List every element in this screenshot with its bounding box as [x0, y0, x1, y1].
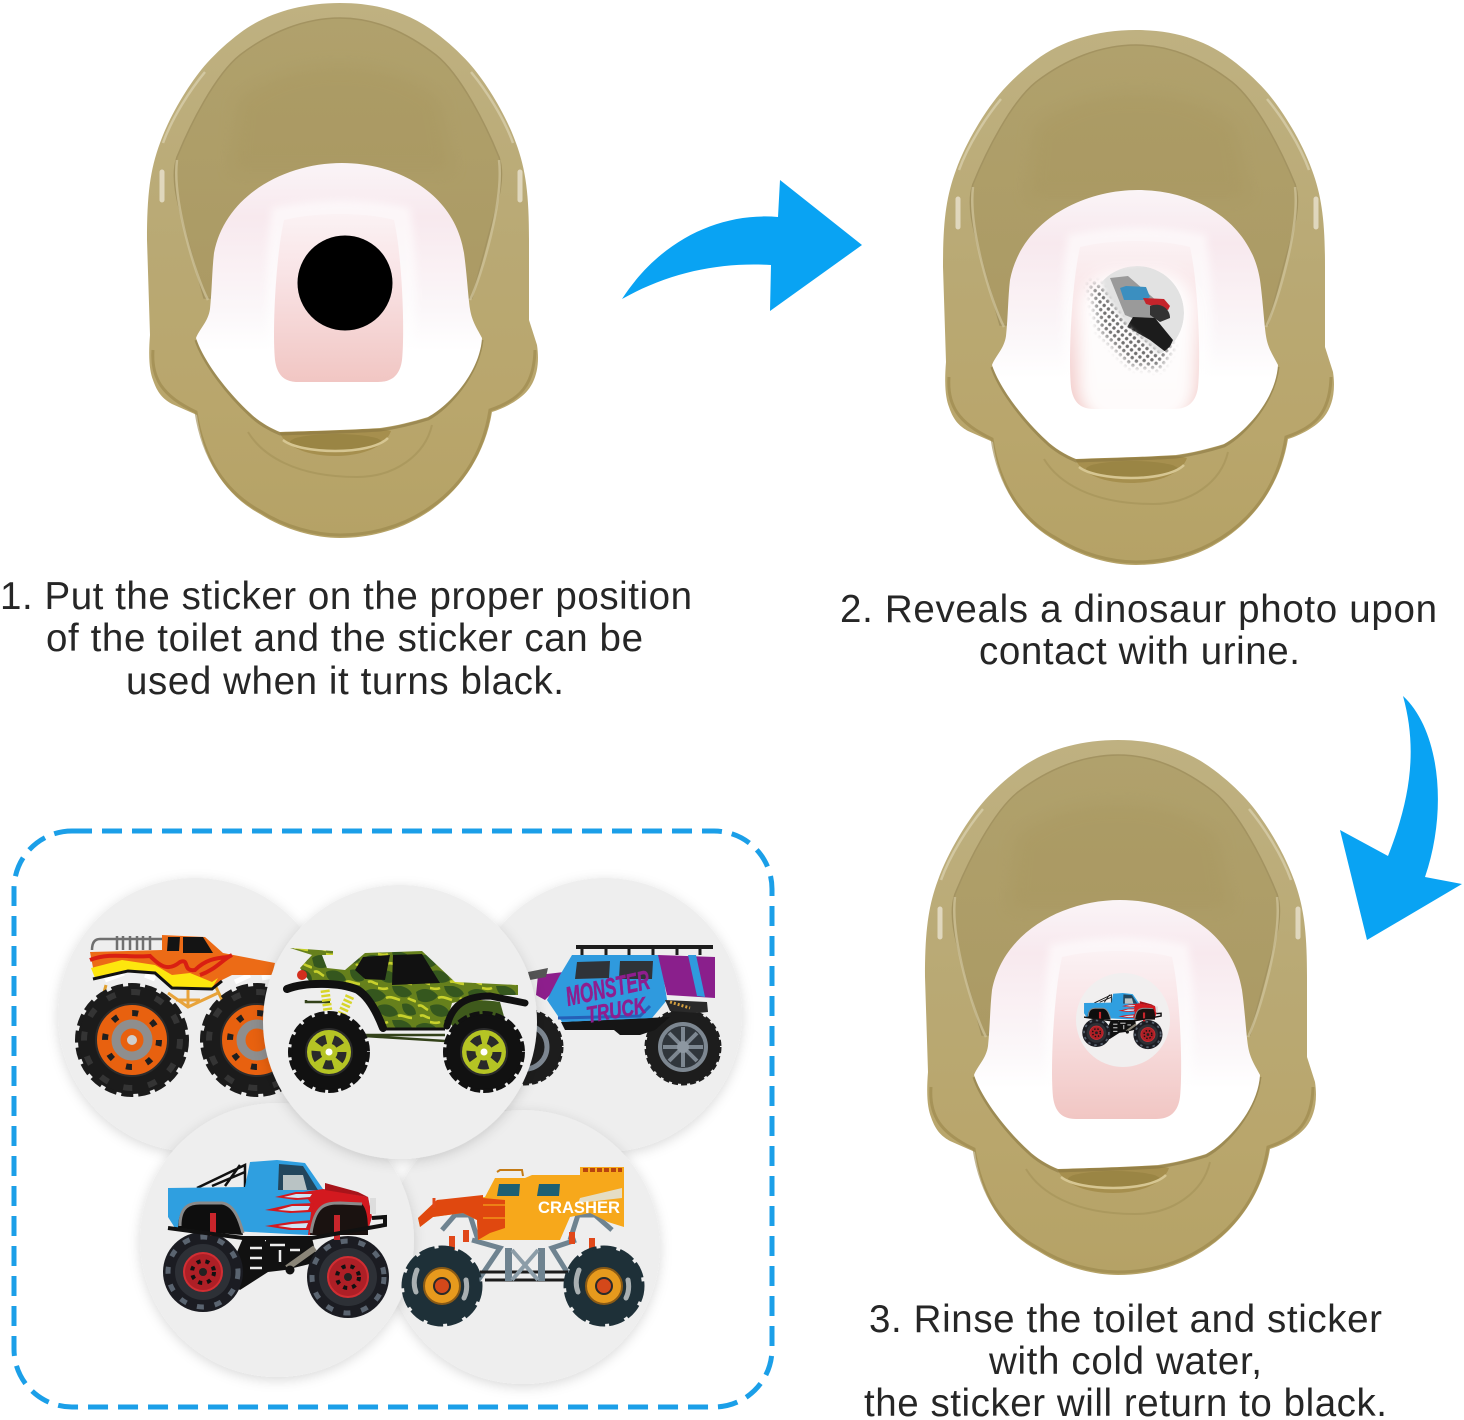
sticker 3: blue and purple monster truck: [468, 878, 742, 1152]
sticker 4: blue and red flame truck: [140, 1103, 414, 1377]
caption: step 3: with cold water,: [988, 1340, 1262, 1383]
sticker: revealed truck: [1102, 266, 1184, 356]
caption: step 1: of the toilet and the sticker can be: [46, 617, 643, 660]
panel: dashed sticker frame: [14, 831, 772, 1407]
truck lettering: MONSTER: [563, 965, 653, 1012]
caption: step 1: 1. Put the sticker on the proper position: [0, 575, 692, 618]
potty step 2 with partly revealed sticker: [943, 30, 1334, 565]
caption: step 1: used when it turns black.: [126, 660, 564, 703]
urine fade over the basin: [1078, 272, 1196, 428]
sticker 5: orange crasher truck base: [386, 1110, 660, 1384]
dither dots: [1086, 280, 1176, 373]
arrow: step 1 to step 2: [622, 180, 862, 311]
truck lettering: CRASHER: [538, 1198, 620, 1217]
arrow: step 2 to step 3: [1340, 696, 1462, 940]
potty step 1 with black sticker: [147, 3, 538, 538]
sticker 1: orange flame truck: [58, 878, 332, 1152]
potty step 3 with rinsed sticker: [925, 740, 1316, 1275]
sticker 2: camouflage truck: [263, 885, 537, 1159]
caption: step 3: 3. Rinse the toilet and sticker: [869, 1298, 1382, 1341]
caption: step 2: contact with urine.: [979, 630, 1300, 673]
sticker 5: orange crasher truck: [403, 1167, 643, 1325]
sticker 3: blue and purple monster truck: TRUCK: [584, 992, 649, 1028]
caption: step 2: 2. Reveals a dinosaur photo upon: [840, 588, 1437, 631]
sticker: truck on light circle: [1076, 973, 1170, 1067]
sticker: black circle: [298, 236, 392, 330]
